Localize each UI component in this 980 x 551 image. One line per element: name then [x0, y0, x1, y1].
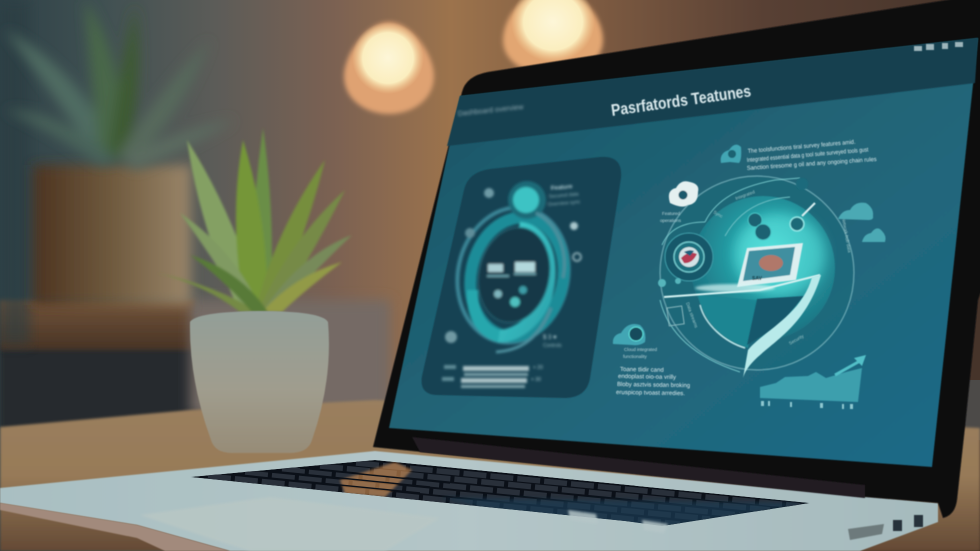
header icons: [914, 42, 963, 51]
key rows: [208, 463, 800, 524]
background plant: [5, 0, 235, 305]
panel: left rounded dial: Controls: [543, 343, 562, 349]
node icons: [658, 178, 815, 287]
diagram micro labels: Integrated: [735, 189, 756, 201]
panel: left rounded dial: + 20: [533, 365, 543, 371]
diagram micro labels: Security: [788, 333, 805, 346]
dark wedge: [747, 296, 804, 345]
front edge of base: [0, 503, 230, 551]
outer dial ring: [445, 197, 581, 353]
plant leaves: [157, 128, 352, 312]
small lens circle: [665, 233, 713, 281]
background plant leaves: [5, 0, 235, 170]
potted plant: [157, 128, 352, 453]
panel: left rounded dial: + 30: [531, 377, 541, 383]
data table icon: [667, 306, 684, 326]
chart axis ticks: [761, 401, 853, 409]
warm reflection on keys: [340, 462, 412, 497]
panel: right feature diagram: [613, 140, 886, 409]
diagram micro labels: Data streams: [685, 302, 699, 329]
panel: left rounded dial: Overview sync: [548, 199, 581, 208]
diagram micro labels: Network hub data: [841, 217, 852, 253]
white planter pot: [190, 311, 329, 453]
diagram micro labels: [685, 189, 852, 346]
area chart: [760, 355, 866, 409]
hinge strip: [412, 437, 865, 498]
top paragraph: Sanction tiresome g oil and any ongoing chain rules: [747, 157, 877, 172]
orbit arcs: [660, 178, 800, 372]
lower paragraph: [616, 367, 690, 397]
lower cloud label: Cloud integrated: [624, 347, 658, 352]
diagram micro labels: Sync: [712, 210, 724, 219]
pendant lamp left: [344, 22, 434, 114]
blurred key highlights: [568, 510, 668, 533]
cloud icons: [838, 203, 886, 242]
dial small labels: Feature: [551, 184, 573, 192]
screen header bar: [447, 38, 978, 146]
screen: [389, 38, 978, 467]
header small label: Dashboard overview: [457, 104, 525, 118]
shield swoosh: [743, 275, 821, 378]
light platform line: [664, 275, 820, 297]
laptop lid: [373, 0, 980, 518]
main disc: [660, 176, 854, 370]
dial values: [488, 264, 503, 272]
laptop base: [0, 451, 938, 551]
white cloud label: Featured: [662, 211, 681, 216]
trackpad: [140, 497, 440, 551]
lower cloud icon: [613, 324, 645, 345]
top speech cloud: [721, 145, 741, 163]
lower paragraph: Bloby asztvis sodan broking: [617, 382, 690, 389]
title: Pasrfatords Teatunes: [610, 82, 752, 120]
lower cloud label: functionality: [623, 354, 648, 359]
panel: left rounded dial: [422, 157, 621, 398]
key gaps over reflection: [240, 468, 450, 493]
lower cloud label: [623, 347, 658, 359]
lower and side arcs: [496, 308, 551, 352]
cyan ring: [460, 209, 574, 345]
mini device on platform: SAV: [752, 276, 763, 282]
top paragraph: Integrated essential data g tool suite surveyed tools gust: [747, 147, 869, 164]
lower paragraph: endoplast oio-oa vrilly: [618, 374, 676, 381]
mini device on platform: [737, 243, 803, 287]
progress bars: [463, 366, 529, 371]
top paragraph: The toolsfunctions tiral survey features amid.: [748, 140, 856, 155]
wooden desk: [0, 400, 980, 551]
side ports: [848, 515, 923, 540]
pendant lamp right: [503, 0, 603, 75]
glow behind device: [735, 213, 825, 297]
panel: left rounded dial: Secured data: [549, 191, 579, 200]
background plant pot: [33, 165, 191, 305]
small icons around dial: [484, 188, 494, 198]
white cloud with icon: [669, 181, 698, 207]
top paragraph: [747, 140, 877, 172]
inner dial: [470, 221, 558, 329]
panel: left rounded dial: $ 3 ♥: [543, 335, 557, 341]
lower paragraph: Toane tlidir cand: [620, 367, 664, 374]
out of focus front keys: [446, 496, 804, 526]
white cloud label: operations: [660, 218, 682, 223]
keyboard: [190, 460, 810, 530]
lower paragraph: eruspicop tvoast arredies.: [616, 390, 685, 397]
top node: [508, 181, 546, 219]
white cloud label: [660, 211, 682, 223]
